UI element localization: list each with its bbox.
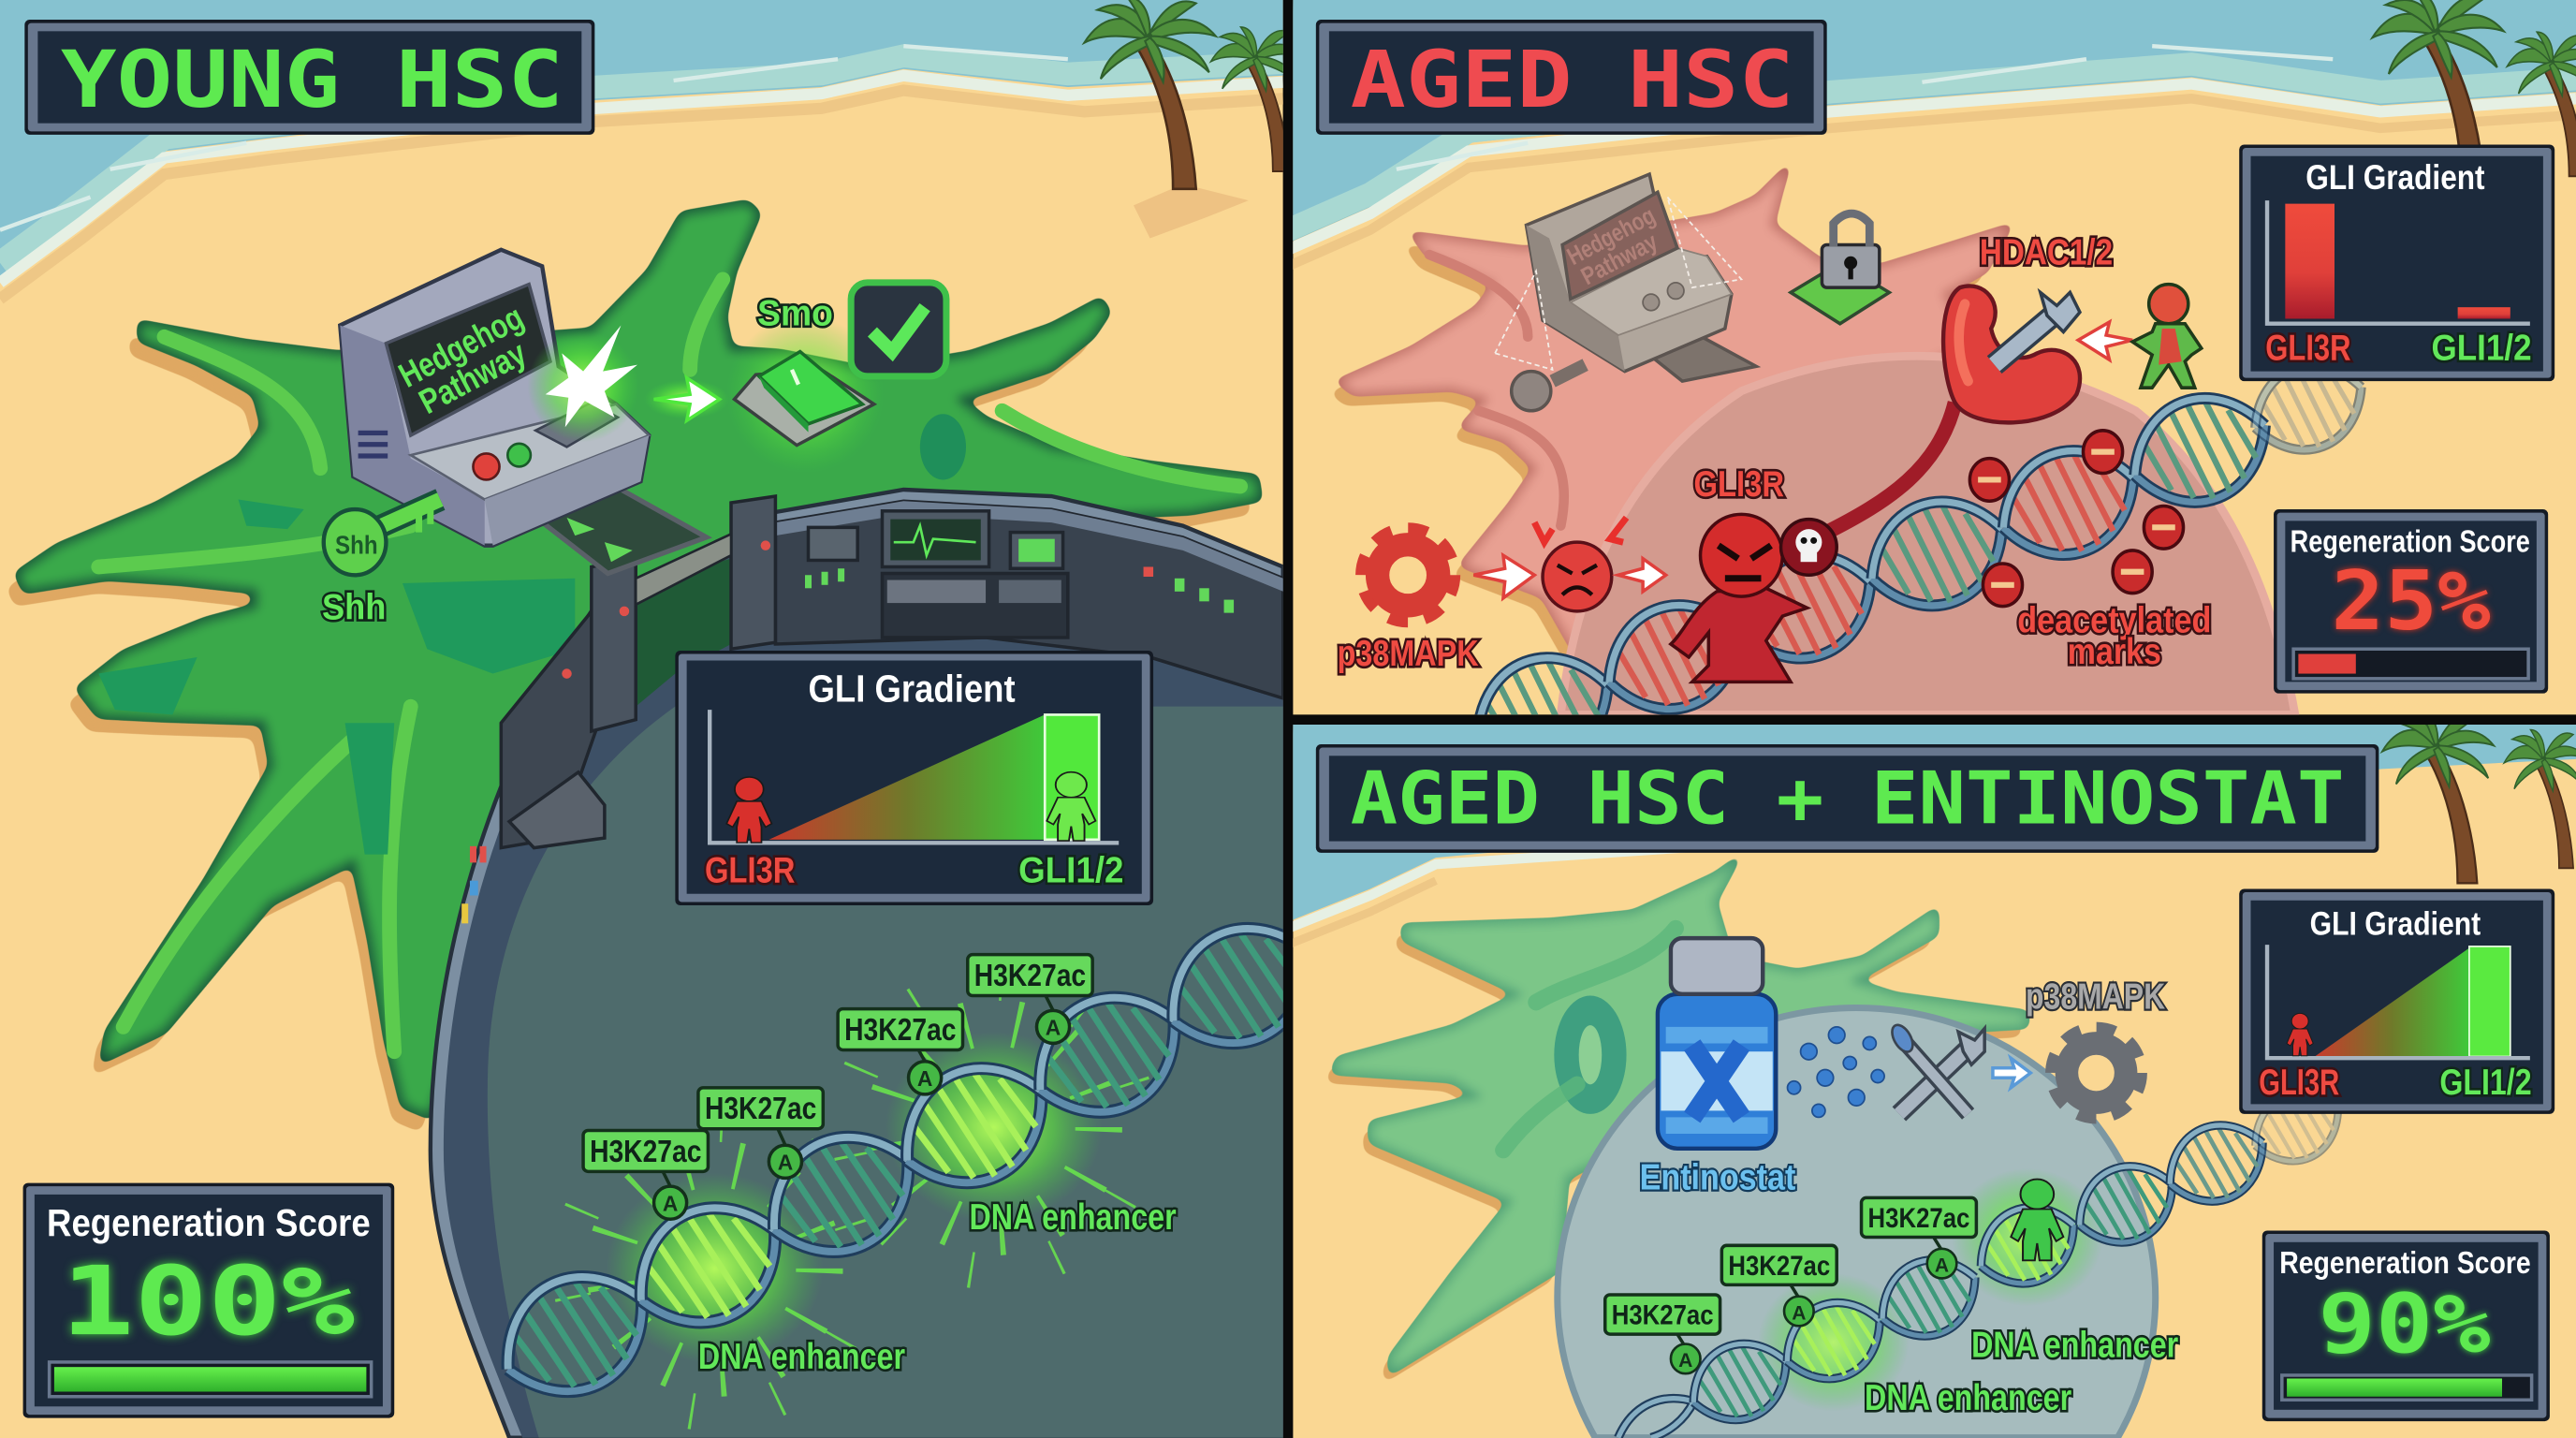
label: deacetylated marks: marks <box>2068 632 2161 672</box>
H3K27ac tag 4: H3K27ac <box>974 959 1086 993</box>
treated nucleus <box>1558 1007 2156 1438</box>
axis label GLI1/2: GLI1/2 <box>1018 850 1123 890</box>
H3K27ac tag 2 <box>698 1088 823 1178</box>
H3K27ac tag 1: H3K27ac <box>590 1135 701 1169</box>
icon: crossed wrench tools <box>1888 1021 1984 1114</box>
small mixed GLI figure <box>2132 285 2202 388</box>
dim screen text: Pathway <box>1576 227 1662 290</box>
aged nucleus <box>1560 356 2295 714</box>
panel: GLI gradient young <box>675 651 1153 905</box>
palm trees <box>2372 0 2576 184</box>
H3K27ac tag 2 <box>1721 1245 1837 1326</box>
green GLI figure <box>2011 1180 2063 1260</box>
panel: regeneration score aged <box>2274 509 2548 694</box>
drug particles <box>1788 1027 1884 1117</box>
palm trees <box>1084 0 1303 238</box>
arrow face to GLI3R <box>1618 559 1666 592</box>
label: p38MAPK: p38MAPK <box>2026 977 2165 1018</box>
H3K27ac tag 3 <box>1862 1197 1976 1278</box>
Hedgehog Pathway machine <box>340 250 707 574</box>
label: DNA enhancer upper: DNA enhancer <box>970 1197 1177 1238</box>
label: HDAC1/2: HDAC1/2 <box>1980 233 2113 273</box>
title: young HSC: YOUNG HSC <box>61 34 564 125</box>
gradient chart <box>2267 945 2530 1058</box>
score label: Regeneration Score <box>2279 1246 2531 1281</box>
H3K27ac tag 1: A <box>1678 1350 1692 1372</box>
aged cell body <box>1329 165 2011 668</box>
DNA helix aged <box>1474 381 2366 715</box>
label: Shh: Shh <box>322 588 386 628</box>
icon: HDAC enzyme <box>1943 286 2080 422</box>
panel: GLI gradient treated <box>2239 888 2554 1114</box>
label: GLI3R: GLI3R <box>1694 464 1784 505</box>
label: Entinostat: Entinostat <box>1640 1158 1795 1198</box>
beach background <box>0 0 1283 1438</box>
beach background <box>1288 725 2576 1438</box>
H3K27ac tag 3 <box>838 1009 962 1094</box>
icon: angry face <box>1534 518 1627 611</box>
icon: check box <box>851 283 946 376</box>
label: DNA enhancer upper: DNA enhancer <box>1971 1326 2178 1366</box>
label: deacetylated marks: deacetylated <box>2017 601 2211 641</box>
icon: Shh key <box>324 500 440 575</box>
title: aged HSC <box>1316 20 1827 135</box>
score value: 25% <box>2331 553 2491 649</box>
H3K27ac tag 3: H3K27ac <box>844 1013 956 1048</box>
icon: red p38MAPK gear <box>1364 531 1452 619</box>
arrow to HDAC <box>2078 322 2132 360</box>
arrow to Smo <box>644 378 729 420</box>
GLI3R figure with skull <box>1671 514 1837 682</box>
H3K27ac tag 2: A <box>778 1151 793 1175</box>
arrow gear to face <box>1473 555 1534 598</box>
muted green cell <box>1325 856 2027 1384</box>
bar chart <box>2267 200 2530 324</box>
machine screen text: Pathway <box>413 333 533 421</box>
icon: locked Smo switch <box>1791 213 1889 324</box>
H3K27ac tag 1 <box>1605 1295 1720 1373</box>
arrow to gear <box>1993 1058 2030 1088</box>
label: deacetylated marks <box>2017 601 2211 672</box>
panel: aged HSC <box>1288 0 2576 783</box>
H3K27ac tag 3: H3K27ac <box>1868 1203 1969 1234</box>
title: aged HSC + entinostat: AGED HSC + ENTINOSTAT <box>1351 756 2345 841</box>
palm trees <box>2382 711 2576 883</box>
panel: regeneration score treated <box>2262 1231 2550 1421</box>
label: DNA enhancer lower: DNA enhancer <box>1865 1378 2071 1418</box>
axis label GLI3R: GLI3R <box>2265 328 2351 368</box>
deacetylated marks <box>1969 431 2184 607</box>
score label: Regeneration Score <box>47 1201 371 1244</box>
cell body <box>7 202 1260 1132</box>
chart title: GLI Gradient <box>2310 906 2481 943</box>
greyed Hedgehog Pathway machine <box>1495 174 1756 381</box>
axis label GLI1/2: GLI1/2 <box>2432 328 2532 368</box>
score bar <box>2293 649 2528 679</box>
score bar <box>2282 1375 2532 1400</box>
tether HDAC to GLI3R <box>1823 403 1955 534</box>
score value: 90% <box>2318 1276 2491 1372</box>
title: aged HSC + entinostat <box>1316 744 2378 853</box>
chart title: GLI Gradient <box>2305 158 2485 197</box>
label: Smo: Smo <box>757 293 833 333</box>
H3K27ac tag 3: A <box>917 1066 932 1091</box>
DNA helix with enhancers <box>482 902 1333 1418</box>
DNA helix treated <box>1618 1078 2351 1438</box>
label: DNA enhancer lower: DNA enhancer <box>698 1337 905 1377</box>
icon: Shh key: Shh <box>335 530 378 559</box>
H3K27ac tag 2: A <box>1792 1302 1806 1324</box>
nucleus with console wall <box>431 490 1283 1438</box>
machine screen text: Hedgehog <box>392 298 530 395</box>
axis label GLI3R: GLI3R <box>705 850 796 890</box>
axis label GLI3R: GLI3R <box>2259 1063 2339 1103</box>
H3K27ac tag 4: A <box>1046 1016 1061 1040</box>
axis label GLI1/2: GLI1/2 <box>2439 1063 2532 1103</box>
H3K27ac tag 1: A <box>663 1191 678 1215</box>
dim screen text <box>1562 201 1662 290</box>
dim screen text: Hedgehog <box>1562 201 1660 271</box>
gradient chart <box>710 710 1119 843</box>
icon: activation burst <box>527 325 639 442</box>
chart title: GLI Gradient <box>809 667 1016 710</box>
icon: wrench <box>1995 292 2080 365</box>
machine screen text <box>397 309 526 414</box>
H3K27ac tag 2: H3K27ac <box>1728 1251 1830 1282</box>
H3K27ac tag 3: A <box>1935 1255 1949 1276</box>
icon: Entinostat bottle <box>1658 938 1776 1149</box>
title: young HSC <box>24 20 594 135</box>
label: p38MAPK: p38MAPK <box>1338 634 1479 674</box>
panel: young HSC <box>0 0 1333 1438</box>
panel: aged HSC + entinostat <box>1288 711 2576 1438</box>
panel: GLI gradient aged <box>2239 144 2554 381</box>
score value: 100% <box>61 1247 355 1357</box>
beach background <box>1288 0 2576 714</box>
H3K27ac tag 1 <box>583 1130 708 1219</box>
score bar <box>50 1362 372 1397</box>
icon: grey p38MAPK gear <box>2054 1030 2139 1116</box>
Smo switch <box>732 319 877 461</box>
panel: regeneration score young <box>23 1183 394 1418</box>
icon: grey key <box>1512 365 1586 411</box>
H3K27ac tag 4 <box>968 955 1092 1043</box>
H3K27ac tag 2: H3K27ac <box>705 1092 816 1126</box>
title: aged HSC: AGED HSC <box>1351 34 1794 125</box>
H3K27ac tag 1: H3K27ac <box>1612 1300 1714 1331</box>
